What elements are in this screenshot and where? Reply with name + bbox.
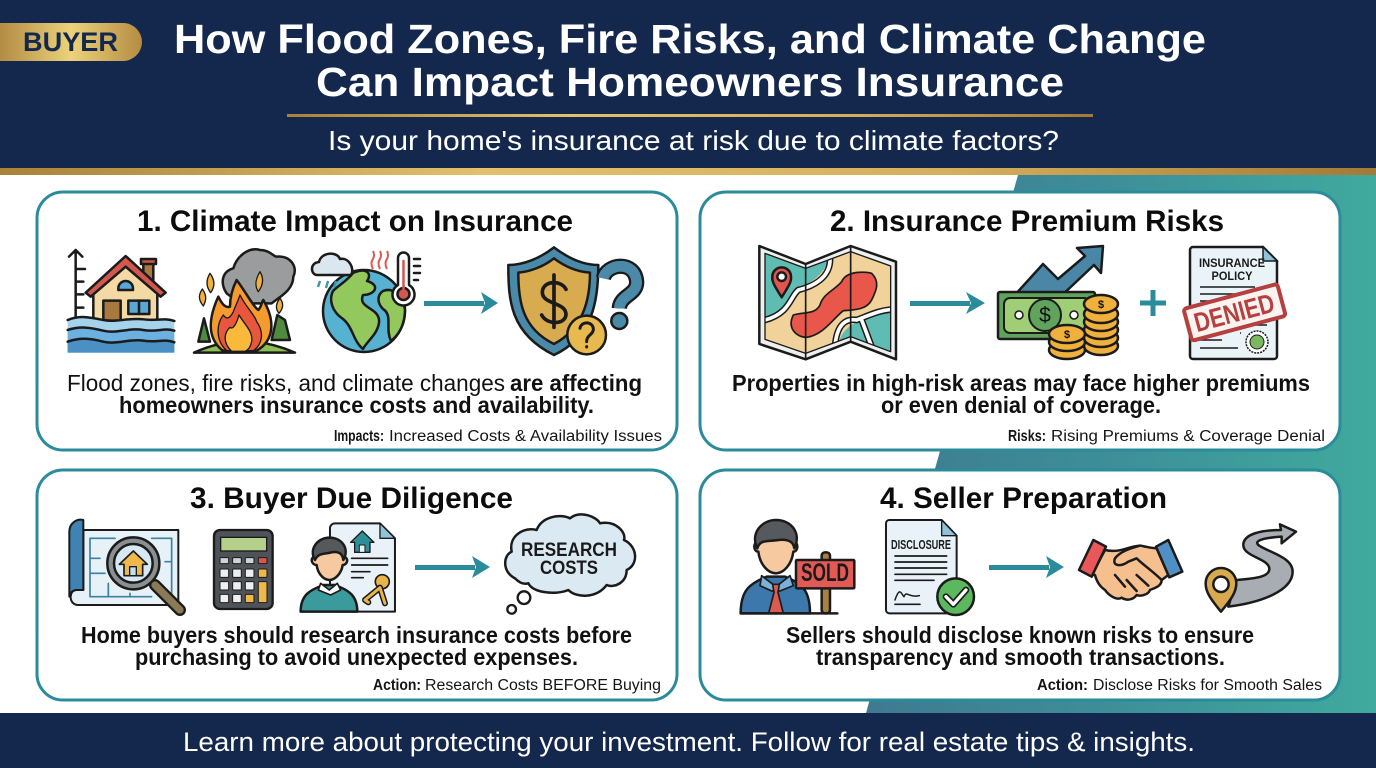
icon: seller with sold sign: SOLD	[801, 559, 849, 587]
icon: calculator	[214, 530, 273, 609]
arrow	[989, 556, 1064, 578]
heading: 3. Buyer Due Diligence	[190, 482, 513, 515]
body text	[81, 622, 632, 670]
footnote: Research Costs BEFORE Buying	[425, 677, 661, 694]
icon: road with location pin	[1206, 524, 1296, 612]
icon: money and rising arrow	[998, 246, 1118, 359]
icon: thought cloud: RESEARCH	[521, 540, 617, 561]
footnote: Rising Premiums & Coverage Denial	[1051, 428, 1325, 445]
arrow	[415, 556, 490, 578]
body text: Home buyers should research insurance costs before	[81, 622, 632, 648]
body text: purchasing to avoid unexpected expenses.	[135, 644, 578, 670]
title: How Flood Zones, Fire Risks, and Climate Change	[174, 16, 1206, 62]
arrow	[424, 292, 498, 314]
panel: 1. climate impact on insurance	[37, 192, 677, 450]
badge: BUYER: BUYER	[23, 27, 118, 57]
icon: denied policy document	[1183, 247, 1286, 359]
subtitle: Is your home's insurance at risk due to climate factors?	[328, 125, 1059, 156]
icon: wildfire	[194, 249, 295, 353]
body text: Properties in high-risk areas may face higher premiums	[732, 370, 1310, 396]
body text	[732, 370, 1310, 418]
footnote: Action:	[373, 677, 421, 694]
panel: 4. seller preparation	[700, 470, 1340, 700]
footnote: Disclose Risks for Smooth Sales	[1093, 677, 1322, 694]
body text	[786, 622, 1254, 670]
body text: or even denial of coverage.	[881, 392, 1161, 418]
arrow	[910, 292, 985, 314]
heading: 1. Climate Impact on Insurance	[137, 205, 573, 238]
body text: transparency and smooth transactions.	[816, 644, 1225, 670]
icon: denied policy document: POLICY	[1212, 269, 1252, 283]
footnote: Increased Costs & Availability Issues	[389, 428, 662, 445]
icon: risk map	[759, 246, 897, 360]
badge: BUYER	[0, 23, 142, 61]
body text: homeowners insurance costs and availability.	[119, 392, 594, 418]
teal diagonal background	[866, 175, 1376, 713]
icon: flooded house	[68, 250, 174, 353]
footer: Learn more about protecting your investment. Follow for real estate tips & insights.	[183, 727, 1195, 757]
icon: shield with dollar and question mark	[508, 247, 637, 355]
icon: disclosure document: DISCLOSURE	[891, 537, 951, 552]
icon: money and rising arrow: $	[1098, 299, 1104, 311]
icon: denied policy document: INSURANCE	[1199, 256, 1265, 270]
footnote: Impacts:	[334, 428, 384, 445]
icon: blueprint with magnifier	[69, 520, 180, 610]
icon: thought cloud: COSTS	[540, 558, 598, 579]
icon: money and rising arrow: $	[1064, 329, 1070, 341]
icon: plus	[1140, 290, 1166, 316]
body text: Sellers should disclose known risks to ensure	[786, 622, 1254, 648]
heading: 4. Seller Preparation	[880, 482, 1167, 515]
header band	[0, 0, 1376, 175]
icon: disclosure document	[886, 520, 974, 615]
icon: money and rising arrow: $	[1039, 304, 1051, 327]
heading: 2. Insurance Premium Risks	[830, 205, 1224, 238]
icon: seller with sold sign	[741, 520, 854, 613]
icon: handshake	[1079, 540, 1182, 600]
panel: 2. insurance premium risks	[700, 192, 1340, 450]
icon: buyer with document and keys	[301, 523, 395, 612]
body text: are affecting	[510, 370, 642, 396]
panel: 3. buyer due diligence	[37, 470, 677, 700]
title	[174, 16, 1206, 105]
footnote: Action:	[1037, 677, 1088, 694]
body text	[67, 370, 642, 418]
footer	[0, 713, 1376, 768]
footnote: Risks:	[1008, 428, 1046, 445]
title: Can Impact Homeowners Insurance	[316, 59, 1064, 105]
icon: globe with cloud and thermometer	[312, 251, 420, 352]
icon: denied policy document: DENIED	[1191, 288, 1278, 338]
icon: thought cloud	[505, 514, 635, 614]
body text: Flood zones, fire risks, and climate changes	[67, 370, 505, 396]
